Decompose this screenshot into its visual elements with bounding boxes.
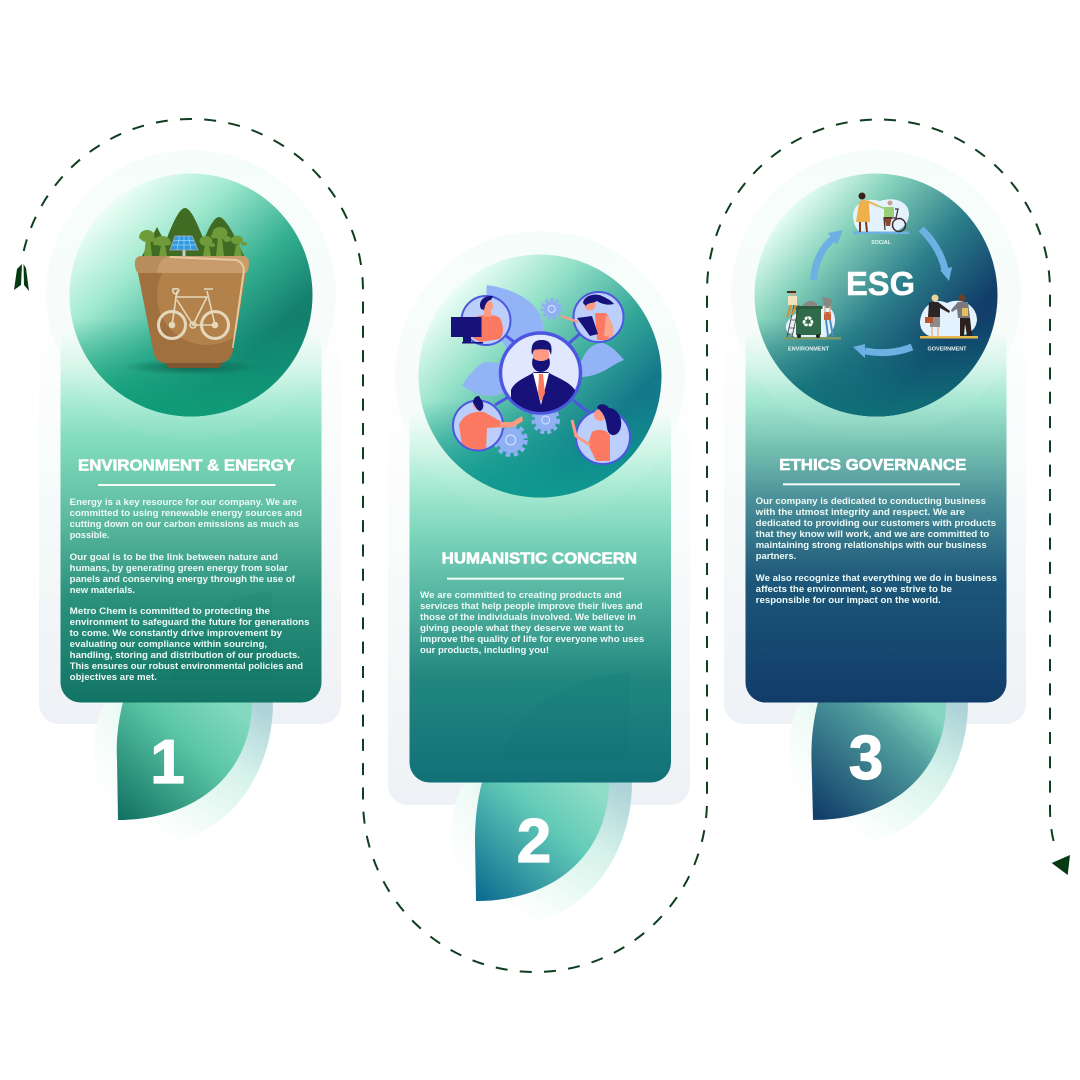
outer pale panel 2 <box>388 388 690 805</box>
body text 3: responsible for our impact on the world. <box>756 595 941 606</box>
body text 1: cutting down on our carbon emissions as much as <box>70 519 299 530</box>
circle halo 3 <box>731 150 1021 440</box>
icon: plant pot with bicycle, trees and solar panel <box>131 208 249 374</box>
arrow: dashed connector path <box>24 119 1055 972</box>
connectors <box>495 332 592 415</box>
environment figures: ♻ <box>801 313 815 331</box>
body text 1: environment to safeguard the future for generations <box>70 617 310 628</box>
inner card 3 <box>746 327 1006 702</box>
number leaf 3 <box>811 702 946 820</box>
gradient circle 2 <box>418 254 662 498</box>
number 3: 3 <box>849 724 883 793</box>
body text 3: maintaining strong relationships with our business <box>756 540 987 551</box>
watermark leaf 2 <box>500 672 630 760</box>
circle halo 1 <box>46 150 336 440</box>
icon: ESG cycle: GOVERNMENT <box>928 346 967 352</box>
bicycle <box>158 289 228 338</box>
body text 1: humans, by generating green energy from solar <box>70 563 288 574</box>
arrowhead: start <box>14 264 29 291</box>
solar panel <box>170 236 198 257</box>
body text 3: partners. <box>756 551 796 562</box>
body text 2: services that help people improve their lives and <box>420 601 643 612</box>
number leaf 1 <box>117 702 252 820</box>
mountains <box>142 208 244 256</box>
bottom-right person <box>572 404 630 464</box>
outer pale panel 1 <box>39 307 341 724</box>
body text 3: We also recognize that everything we do in business <box>756 573 997 584</box>
body text 2: those of the individuals involved. We believe in <box>420 612 636 623</box>
heading 2: HUMANISTIC CONCERN <box>442 550 637 568</box>
icon: team network around manager <box>451 285 630 464</box>
outer pale panel 3 <box>724 307 1026 724</box>
body text 1: committed to using renewable energy sources and <box>70 508 302 519</box>
top-right person <box>561 292 624 342</box>
body text 2: improve the quality of life for everyone who uses <box>420 634 644 645</box>
body text 2: We are committed to creating products and <box>420 590 622 601</box>
body text 2: our products, including you! <box>420 645 549 656</box>
body text 1: objectives are met. <box>70 672 157 683</box>
icon: ESG cycle: ENVIRONMENT <box>788 346 830 352</box>
central manager <box>500 333 580 415</box>
watermark leaf 1 <box>170 591 272 680</box>
number leaf halo 2 <box>452 782 632 922</box>
body text 1: Energy is a key resource for our company. We are <box>70 497 297 508</box>
heading 3: ETHICS GOVERNANCE <box>779 457 966 474</box>
body text 1: to come. We constantly drive improvement by <box>70 628 283 639</box>
gradient circle 3 <box>754 174 998 416</box>
number 2: 2 <box>517 807 551 876</box>
body text 2 <box>420 590 644 656</box>
body text 3: that they know will work, and we are committed to <box>756 529 989 540</box>
body text 1: panels and conserving energy through the use of <box>70 574 296 585</box>
ESG wordmark: ESG <box>846 265 915 302</box>
gradient circle 1 <box>70 174 312 416</box>
inner card 1 <box>60 327 322 702</box>
leaves <box>462 285 624 396</box>
gears <box>496 300 561 455</box>
body text 3 <box>755 496 997 606</box>
inner card 2 <box>410 407 671 782</box>
social figures <box>853 192 909 234</box>
number leaf halo 1 <box>94 702 273 842</box>
heading 1: ENVIRONMENT & ENERGY <box>78 458 296 474</box>
panel: ethics governance <box>724 150 1026 842</box>
body text 1: evaluating our compliance within sourcing, <box>70 639 267 650</box>
cycle labels: SOCIAL <box>871 240 892 246</box>
body text 1: possible. <box>70 530 110 541</box>
body text 1: Metro Chem is committed to protecting the <box>70 606 270 617</box>
body text 1: new materials. <box>70 585 135 596</box>
environment figures <box>784 290 841 340</box>
body text 1: This ensures our robust environmental policies and <box>70 661 303 672</box>
body text 3: Our company is dedicated to conducting business <box>756 496 986 507</box>
trees <box>139 227 247 256</box>
body text 1 <box>70 497 310 683</box>
top-left person <box>451 296 510 345</box>
body text 1: Our goal is to be the link between nature and <box>70 552 278 563</box>
arrowhead: end <box>1052 855 1070 875</box>
body text 3: with the utmost integrity and respect. We are <box>755 507 965 518</box>
panel: humanistic concern <box>388 231 690 922</box>
body text 2: giving people what they deserve we want to <box>420 623 624 634</box>
body text 3: affects the environment, so we strive to be <box>756 584 952 595</box>
number leaf 2 <box>475 782 609 901</box>
pot foot <box>165 363 223 368</box>
pot body <box>135 256 249 363</box>
cycle arrows <box>814 229 952 358</box>
circle halo 2 <box>395 231 685 521</box>
number 1: 1 <box>150 728 185 797</box>
shadow <box>122 359 258 375</box>
number leaf halo 3 <box>789 702 968 842</box>
bottom-left person <box>453 396 523 452</box>
icon: ESG cycle <box>784 192 978 358</box>
body text 3: dedicated to providing our customers with products <box>756 518 996 529</box>
body text 1: handling, storing and distribution of our products. <box>70 650 300 661</box>
government figures <box>920 294 978 338</box>
panel: environment & energy <box>39 150 341 842</box>
